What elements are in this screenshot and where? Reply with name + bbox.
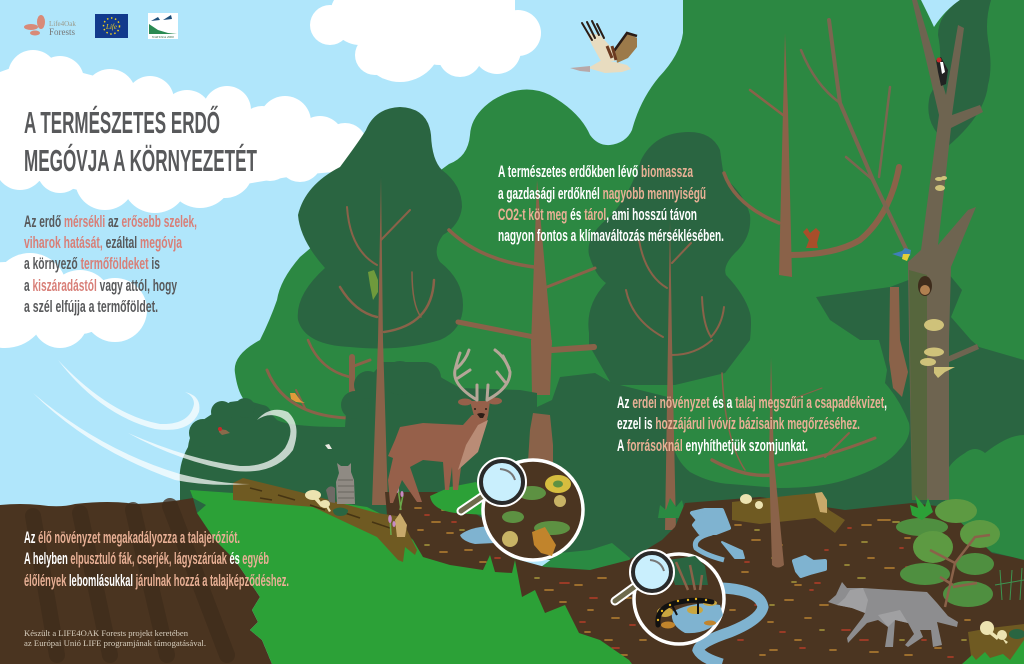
flowers and stump — [388, 485, 407, 537]
logo: Natura 2000: NATURA 2000 — [152, 35, 174, 39]
text: title: A TERMÉSZETES ERDŐ — [24, 104, 220, 140]
dark understory forest — [180, 267, 1024, 560]
trunk mid tree with branches — [626, 220, 724, 530]
grass tuft by trunk — [910, 495, 933, 520]
buzzard in flight — [570, 21, 637, 73]
logo: Natura 2000 — [148, 13, 178, 39]
centre tree trunk upper — [449, 180, 595, 395]
text: water filtering paragraph: A forrásoknál enyhíthetjük szomjunkat. — [617, 437, 808, 455]
text: biomass paragraph: a gazdasági erdőknél nagyobb mennyiségű — [498, 185, 706, 203]
lower left soil — [0, 498, 272, 664]
owl in tree hole — [918, 276, 932, 296]
text: wind protection paragraph: a kiszáradástól vagy attól, hogy — [24, 277, 178, 295]
text: wind protection paragraph: a környező termőföldeket is — [24, 255, 160, 273]
dark tree crown centre — [588, 132, 751, 385]
logo: Life4Oak Forests — [24, 15, 76, 37]
magnifier lens 1 with acorns — [461, 458, 583, 560]
text: title: MEGÓVJA A KÖRNYEZETÉT — [24, 142, 257, 178]
magnifier lens 2 with fire salamander — [615, 550, 724, 644]
background trunk left — [267, 340, 370, 463]
logo: EU LIFE — [95, 14, 128, 38]
text: biomass paragraph — [498, 163, 724, 245]
logo: Life4Oak Forests: Life4Oak — [49, 20, 76, 28]
goldfinch — [218, 427, 230, 435]
text: soil paragraph — [24, 529, 289, 590]
light green canopy blob — [672, 340, 910, 488]
centre trunk lower — [528, 413, 553, 462]
bright grass patch — [430, 482, 490, 515]
bracket fungi — [920, 176, 955, 378]
tree trunk foreground left — [340, 177, 434, 505]
green woodpecker — [368, 270, 378, 300]
text: water filtering paragraph — [617, 394, 887, 455]
mushrooms on log — [305, 490, 331, 512]
text: water filtering paragraph: ezzel is hozzájárul ivóvíz bázisaink megőrzéséhez. — [617, 415, 860, 433]
red squirrel — [803, 228, 820, 248]
leaf litter on floor — [415, 508, 970, 660]
wild cat — [326, 463, 355, 504]
great spotted woodpecker — [936, 57, 948, 86]
text: water filtering paragraph: Az erdei növényzet és a talaj megszűri a csapadékvizet, — [617, 394, 887, 412]
text: credits: az Európai Unió LIFE programjának támogatásával. — [24, 639, 206, 648]
text: wind protection paragraph: Az erdő mérsékli az erősebb szelek, — [24, 213, 197, 231]
mushrooms on right log — [740, 494, 763, 509]
small orange bird — [290, 393, 305, 403]
text: wind protection paragraph: a szél elfújja a termőföldet. — [24, 298, 158, 316]
slim bare tree — [801, 20, 908, 253]
light bush right — [945, 435, 1024, 560]
slender tree in foreground — [712, 357, 875, 568]
grass tuft by centre tree — [658, 498, 686, 518]
grey wolf — [828, 582, 958, 647]
butterfly — [325, 444, 332, 449]
shrub and sapling — [896, 499, 1024, 607]
red deer — [388, 350, 510, 503]
text: biomass paragraph: CO2-t köt meg és tárol, ami hosszú távon — [498, 206, 697, 224]
logo: EU LIFE: Life — [105, 23, 117, 31]
green meadow — [190, 490, 632, 664]
dark tree crown left — [298, 107, 463, 348]
text: soil paragraph: A helyben elpusztuló fák, cserjék, lágyszárúak és egyéb — [24, 550, 269, 568]
sky gap top right — [921, 0, 960, 27]
trunk upper right with squirrel branch — [724, 33, 899, 277]
back forest canopy — [235, 0, 1024, 560]
text: biomass paragraph: nagyon fontos a klímaváltozás mérséklésében. — [498, 227, 724, 245]
corner log with mushrooms — [962, 621, 1024, 664]
wind gusts — [33, 360, 297, 485]
text: soil paragraph: Az élő növényzet megakadályozza a talajeróziót. — [24, 529, 240, 547]
fallen log left — [233, 478, 417, 562]
text: credits — [24, 629, 206, 648]
fallen log right — [732, 492, 845, 533]
text: wind protection paragraph — [24, 213, 197, 316]
stream and ponds — [460, 510, 825, 664]
blue tit — [892, 248, 911, 261]
text: title — [24, 104, 257, 178]
text: biomass paragraph: A természetes erdőkben lévő biomassza — [498, 163, 694, 181]
soil furrows — [33, 506, 227, 655]
dark tree top right — [928, 0, 991, 147]
broken trunk right — [889, 287, 908, 397]
text: wind protection paragraph: viharok hatását, ezáltal megóvja — [24, 234, 183, 252]
logo: Life4Oak Forests: Forests — [49, 27, 76, 37]
big old tree trunk — [908, 0, 983, 500]
clouds — [0, 0, 541, 348]
forest floor — [385, 492, 1024, 664]
text: soil paragraph: élőlények lebomlásukkal járulnak hozzá a talajképződéshez. — [24, 572, 289, 590]
mid-ground grass patch — [530, 543, 632, 575]
text: credits: Készült a LIFE4OAK Forests projekt keretében — [24, 629, 188, 638]
